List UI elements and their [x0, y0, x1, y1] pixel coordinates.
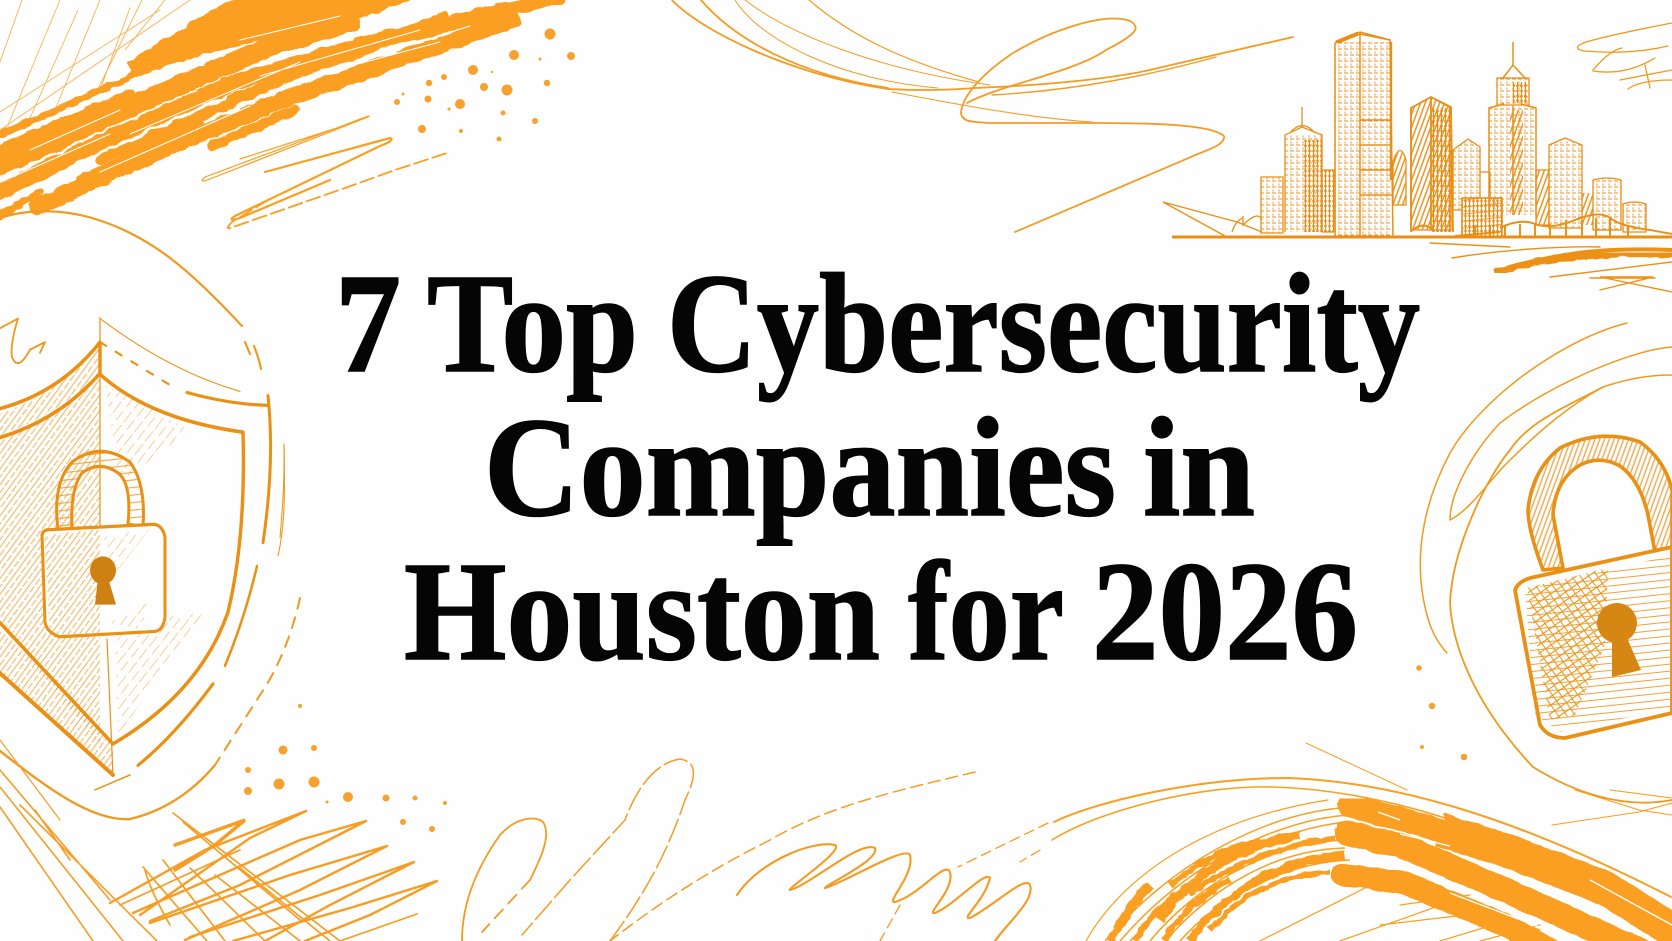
thin arcs over brush: [1052, 743, 1672, 941]
heavy bands: [1343, 806, 1672, 941]
title: [335, 244, 1420, 690]
title line 3: [404, 532, 1358, 690]
ground line: [1172, 236, 1672, 238]
padlock keyhole: [1597, 603, 1641, 677]
padlock in shield: [42, 451, 165, 637]
white scratches in brush: [10, 16, 470, 178]
title line 2: in: [1143, 388, 1255, 546]
shield hatching: [0, 374, 100, 744]
lower thin strokes: [1260, 887, 1540, 941]
title line 3: for: [908, 532, 1064, 690]
hatched tower: [1411, 97, 1453, 232]
sweeping lines: top centre: [672, 0, 1293, 232]
loop strokes: bottom centre: [462, 759, 975, 941]
padlock body: [1515, 547, 1672, 738]
title line 1: Top: [427, 244, 638, 402]
small left buildings: [1261, 150, 1406, 233]
padlock shackle: [1528, 436, 1672, 570]
scribbles below skyline: [1430, 243, 1672, 292]
brush strokes: bottom right: [1052, 743, 1672, 941]
padlock: right: [1420, 323, 1672, 803]
title line 2: Companies: [484, 388, 1116, 546]
shield with padlock: [0, 317, 284, 790]
scribble top right corner: [1577, 23, 1672, 89]
thin hatching top left corner: [0, 0, 190, 130]
tower with spire: [1489, 42, 1536, 215]
splatter dots: lower right: [1416, 665, 1467, 760]
title line 3: 2026: [1092, 532, 1358, 690]
wing structure left: [1163, 202, 1262, 236]
title line 3: Houston: [404, 532, 880, 690]
title line 1: [335, 244, 1420, 402]
brush strokes: top left: [0, 0, 560, 228]
mid buildings: [1453, 139, 1502, 237]
title line 1: 7: [335, 244, 401, 402]
title line 1: Cybersecurity: [667, 244, 1420, 402]
waterfront bridge: [1412, 214, 1672, 237]
squiggle left of shield: [0, 319, 45, 363]
cross-hatch scribble: bottom left: [0, 740, 437, 941]
heavy brush bands: [0, 0, 560, 216]
city skyline illustration: [1163, 32, 1672, 238]
splatter dots: lower left: [244, 704, 447, 832]
spire tower: [1285, 107, 1322, 232]
shield outline: [0, 342, 100, 437]
scratches in lower brush: [1378, 812, 1672, 935]
right buildings: [1536, 138, 1646, 232]
squiggle: bottom centre: [737, 823, 1048, 941]
loop scribbles: [202, 116, 450, 228]
large circle around shield: [0, 211, 300, 819]
tall building: [1335, 32, 1393, 238]
splatter dots: top: [394, 28, 575, 142]
fan strokes: [1105, 808, 1350, 941]
swirl rings around padlock: [1420, 323, 1672, 803]
